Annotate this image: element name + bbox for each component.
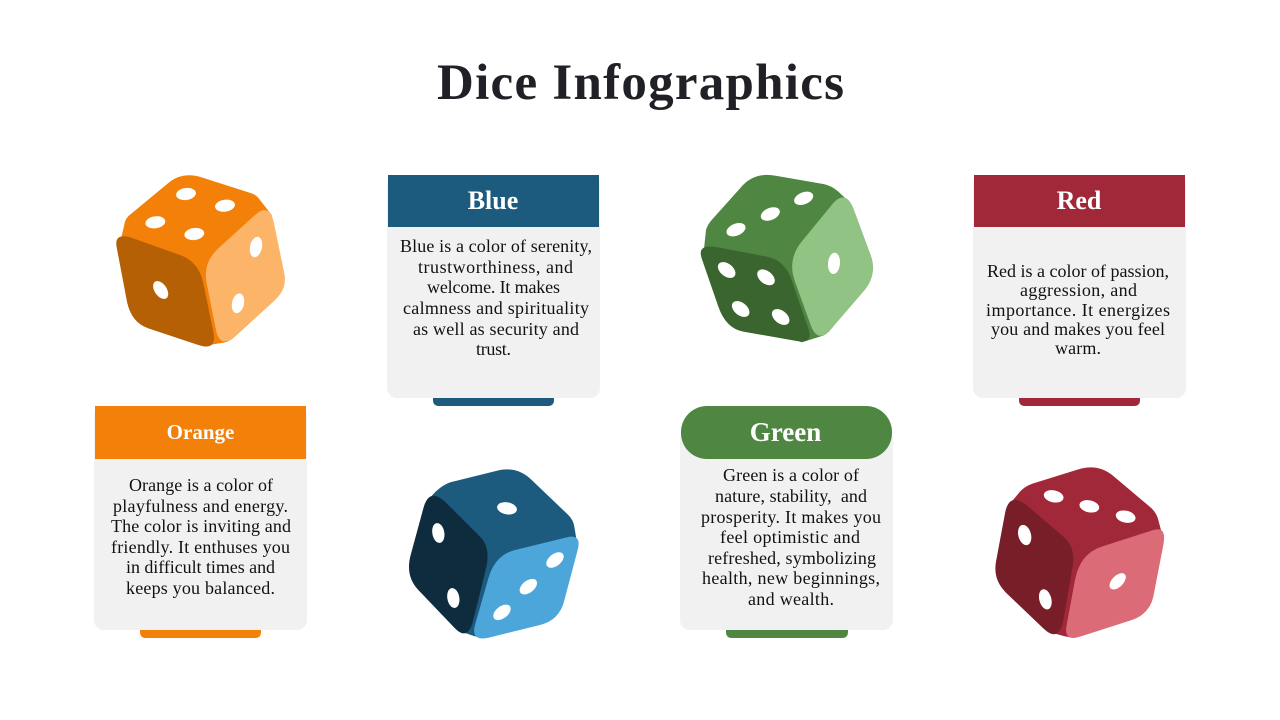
panel: blue bbox=[387, 175, 600, 406]
orange text: in difficult times and bbox=[126, 557, 275, 577]
icon: orange die bbox=[116, 175, 285, 347]
orange text: Orange is a color of bbox=[129, 475, 273, 495]
blue text: trust. bbox=[476, 339, 511, 359]
orange text: friendly. It enthuses you bbox=[111, 537, 290, 557]
orange card bbox=[94, 406, 307, 630]
blue header bbox=[388, 175, 599, 227]
orange text: keeps you balanced. bbox=[126, 578, 275, 598]
red tab bbox=[1019, 390, 1140, 406]
orange text: The color is inviting and bbox=[111, 516, 291, 536]
blue text: welcome. It makes bbox=[427, 277, 560, 297]
orange text bbox=[111, 475, 291, 598]
icon: red die bbox=[995, 467, 1164, 638]
green heading: Green bbox=[750, 417, 821, 447]
blue text: as well as security and bbox=[413, 319, 579, 339]
blue text: trustworthiness, and bbox=[418, 257, 573, 277]
green text bbox=[701, 465, 881, 609]
blue text: Blue is a color of serenity, bbox=[400, 236, 592, 256]
panel: orange bbox=[94, 406, 307, 638]
red text: importance. It energizes bbox=[986, 300, 1170, 320]
red text: warm. bbox=[1055, 338, 1101, 358]
green text: refreshed, symbolizing bbox=[708, 548, 876, 568]
blue heading: Blue bbox=[468, 186, 518, 215]
red heading: Red bbox=[1057, 186, 1102, 215]
orange heading: Orange bbox=[167, 420, 234, 444]
blue tab bbox=[433, 390, 554, 406]
green header bbox=[681, 406, 892, 459]
blue text: calmness and spirituality bbox=[403, 298, 589, 318]
panel: red bbox=[973, 175, 1186, 406]
red card bbox=[973, 175, 1186, 398]
blue text bbox=[400, 236, 592, 359]
orange header bbox=[95, 406, 306, 459]
icon: green die bbox=[701, 175, 873, 342]
green text: prosperity. It makes you bbox=[701, 507, 881, 527]
green text: Green is a color of bbox=[723, 465, 859, 485]
orange tab bbox=[140, 622, 261, 638]
green text: feel optimistic and bbox=[720, 527, 860, 547]
red text: aggression, and bbox=[1020, 280, 1137, 300]
green tab bbox=[726, 622, 848, 638]
green card bbox=[680, 430, 893, 630]
red text bbox=[986, 261, 1170, 358]
green text: health, new beginnings, bbox=[702, 568, 880, 588]
red text: Red is a color of passion, bbox=[987, 261, 1169, 281]
blue card bbox=[387, 175, 600, 398]
green text: and wealth. bbox=[748, 589, 834, 609]
red header bbox=[974, 175, 1185, 227]
panel: green bbox=[680, 406, 893, 638]
orange text: playfulness and energy. bbox=[113, 496, 288, 516]
green text: nature, stability, and bbox=[715, 486, 867, 506]
red text: you and makes you feel bbox=[991, 319, 1165, 339]
icon: blue die bbox=[409, 469, 579, 638]
title: Dice Infographics bbox=[437, 55, 844, 111]
